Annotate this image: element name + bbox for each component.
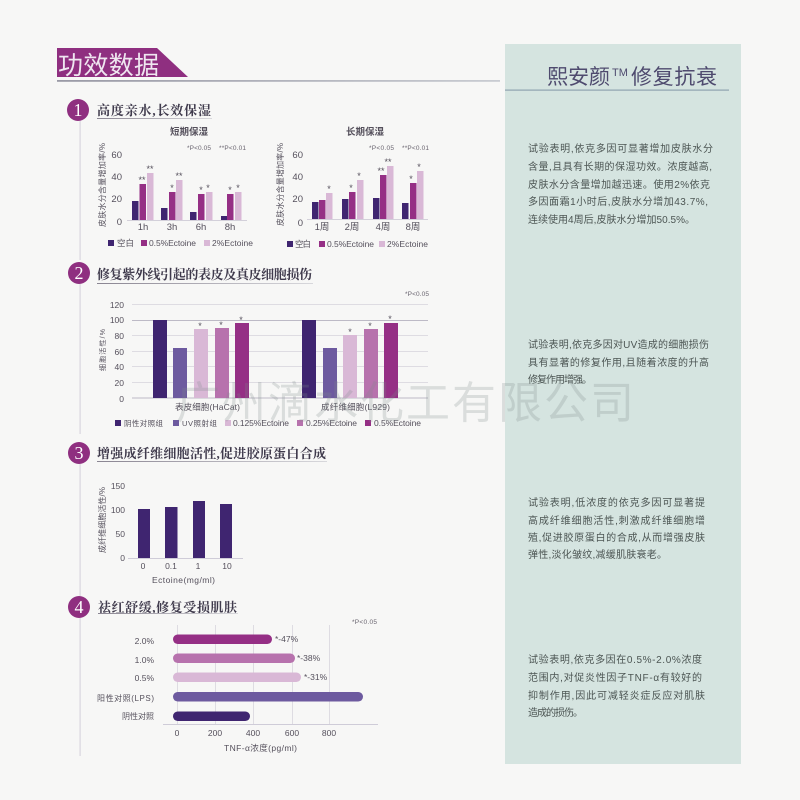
text: fibroblast summary: 殖,促进胶原蛋白的合成,从而增强皮肤 <box>528 531 705 544</box>
chart: fibroblast viability: 10 <box>222 561 232 571</box>
chart: long-term moisture: * <box>357 171 361 181</box>
section 4: soothing <box>68 596 378 756</box>
legend: 0.5%Ectoine <box>374 418 421 428</box>
chart: TNF-alpha: 2.0% <box>135 636 154 646</box>
chart: short-term moisture: ** <box>175 171 183 181</box>
chart: long-term moisture: ** <box>384 157 392 167</box>
chart: long-term moisture: *P<0.05 <box>369 145 394 152</box>
chart: long-term moisture: 2周 <box>345 222 359 233</box>
watermark: 广州滴水化工有限公司 <box>176 379 634 428</box>
chart: TNF-alpha: 200 <box>208 728 222 738</box>
chart: short-term moisture <box>97 126 253 248</box>
chart: cell viability: 40 <box>115 362 124 372</box>
chart: short-term moisture: 60 <box>111 150 122 161</box>
chart: long-term moisture: * <box>409 174 413 184</box>
chart: long-term moisture: 4周 <box>376 222 390 233</box>
panel: right summary column <box>505 44 741 764</box>
chart: TNF-alpha: 400 <box>246 728 260 738</box>
chart: long-term moisture: 40 <box>292 172 303 183</box>
icon: number 1: 1 <box>74 100 82 120</box>
text: TNF summary: 抑制作用,因此可减轻炎症反应对肌肤 <box>528 689 705 702</box>
chart: cell viability: * <box>348 327 352 337</box>
chart: fibroblast viability: 50 <box>116 529 125 539</box>
chart: long-term moisture: 皮肤水分含量增加率/% <box>275 143 285 226</box>
text: fibroblast summary: 试验表明,低浓度的依克多因可显著提 <box>528 496 705 509</box>
chart: long-term moisture: **P<0.01 <box>402 145 429 152</box>
chart: short-term moisture: **P<0.01 <box>219 145 246 152</box>
chart: TNF-alpha: 800 <box>322 728 336 738</box>
chart: short-term moisture: 6h <box>196 222 206 233</box>
text: UV repair summary: 试验表明,依克多因对UV造成的细胞损伤 <box>528 338 709 351</box>
chart: long-term moisture: 1周 <box>315 222 329 233</box>
chart: cell viability: * <box>388 314 392 324</box>
legend <box>287 239 428 249</box>
legend: 阴性对照组 <box>124 418 164 428</box>
chart: cell viability: * <box>239 315 243 325</box>
chart: TNF-alpha <box>97 619 378 753</box>
panel title: 修复抗衰 <box>631 66 717 89</box>
chart: cell viability <box>98 291 429 428</box>
text: hydration summary: 皮肤水分含量增加越迅速。使用2%依克 <box>528 178 710 191</box>
icon: number 3 <box>68 442 90 464</box>
chart: short-term moisture: * <box>170 183 174 193</box>
heading 4: 祛红舒缓,修复受损肌肤 <box>98 600 237 615</box>
title banner <box>57 48 500 82</box>
text: TNF summary: 造成的损伤。 <box>528 706 583 719</box>
chart: cell viability: 60 <box>115 347 124 357</box>
title banner: 功效数据 <box>58 52 159 80</box>
heading 2: 修复紫外线引起的表皮及真皮细胞损伤 <box>97 267 312 282</box>
chart: short-term moisture: 0 <box>117 217 122 228</box>
text: hydration summary: 试验表明,依克多因可显著增加皮肤水分 <box>528 142 713 155</box>
chart: cell viability: 100 <box>110 315 124 325</box>
text: hydration summary <box>528 142 713 226</box>
heading 3: 增强成纤维细胞活性,促进胶原蛋白合成 <box>97 446 326 461</box>
text: hydration summary: 多因面霜1小时后,皮肤水分增加43.7%, <box>528 195 708 208</box>
chart: short-term moisture: 皮肤水分含量增加率/% <box>97 143 107 227</box>
chart: short-term moisture: ** <box>138 175 146 185</box>
legend: 2%Ectoine <box>387 239 428 249</box>
text: TNF summary: 范围内,对促炎性因子TNF-α有较好的 <box>528 671 702 684</box>
text: fibroblast summary <box>528 496 705 561</box>
chart: cell viability: 120 <box>110 300 124 310</box>
chart: TNF-alpha: *-47% <box>275 634 299 644</box>
chart: long-term moisture: 60 <box>292 150 303 161</box>
chart: long-term moisture: 0 <box>298 218 303 229</box>
text: hydration summary: 含量,且具有长期的保湿功效。浓度越高, <box>528 160 712 173</box>
chart: long-term moisture: * <box>327 184 331 194</box>
chart: short-term moisture: *P<0.05 <box>187 145 211 152</box>
legend: 0.5%Ectoine <box>149 238 196 248</box>
chart: short-term moisture: 1h <box>138 222 148 233</box>
text: UV repair summary: 修复作用增强。 <box>528 373 592 386</box>
icon: number 4 <box>68 596 90 618</box>
legend: UV照射组 <box>182 418 218 428</box>
text: TNF summary: 试验表明,依克多因在0.5%-2.0%浓度 <box>528 653 702 666</box>
chart: short-term moisture: 3h <box>167 222 177 233</box>
legend: 0.125%Ectoine <box>233 418 289 428</box>
chart: long-term moisture: ** <box>377 166 385 176</box>
text: UV repair summary: 具有显著的修复作用,且随着浓度的升高 <box>528 356 709 369</box>
chart: cell viability: 80 <box>115 331 124 341</box>
chart: fibroblast viability: 0.1 <box>165 561 177 571</box>
text: UV repair summary <box>528 338 709 386</box>
icon: number 2: 2 <box>74 263 84 283</box>
chart: short-term moisture: * <box>228 185 232 195</box>
chart: short-term moisture: ** <box>146 164 154 174</box>
icon: number 1 <box>67 99 89 121</box>
legend: 空白 <box>117 238 134 248</box>
section 3: fibroblast activity <box>68 442 327 596</box>
section 1: hydration <box>67 99 429 260</box>
chart: TNF-alpha: 阴性对照 <box>122 711 154 721</box>
chart: short-term moisture: * <box>206 183 210 193</box>
chart: cell viability: 表皮细胞(HaCat) <box>175 402 240 412</box>
chart: cell viability: *P<0.05 <box>405 291 429 298</box>
chart: long-term moisture <box>275 126 429 249</box>
chart: cell viability: 成纤维细胞(L929) <box>321 402 390 412</box>
chart: long-term moisture: * <box>417 162 421 172</box>
chart: cell viability: 20 <box>115 378 124 388</box>
chart: TNF-alpha: 0 <box>175 728 180 738</box>
chart: cell viability: * <box>219 320 223 330</box>
chart: short-term moisture: 20 <box>111 194 122 205</box>
chart: TNF-alpha: 600 <box>285 728 299 738</box>
icon: number 2 <box>68 262 90 284</box>
chart: TNF-alpha: *P<0.05 <box>352 619 377 626</box>
chart: cell viability: * <box>198 321 202 331</box>
legend: 0.5%Ectoine <box>327 239 374 249</box>
heading 1: 高度亲水,长效保湿 <box>97 103 211 118</box>
section 2: UV repair <box>68 262 429 434</box>
chart: cell viability: * <box>368 321 372 331</box>
chart: fibroblast viability: 1 <box>196 561 201 571</box>
chart: fibroblast viability: 成纤维细胞活性/% <box>97 487 107 553</box>
icon: number 3: 3 <box>74 443 84 463</box>
chart: TNF-alpha: TNF-α浓度(pg/ml) <box>224 743 297 753</box>
chart: fibroblast viability <box>97 481 243 585</box>
text: fibroblast summary: 高成纤维细胞活性,刺激成纤维细胞增 <box>528 514 705 527</box>
chart: short-term moisture: 40 <box>111 172 122 183</box>
chart: TNF-alpha: *-31% <box>304 672 328 682</box>
legend: 2%Ectoine <box>212 238 253 248</box>
chart: long-term moisture: * <box>349 183 353 193</box>
chart: TNF-alpha: 1.0% <box>135 655 154 665</box>
panel title: TM <box>612 67 628 79</box>
legend <box>108 238 253 248</box>
chart: cell viability: 0 <box>119 394 124 404</box>
chart: long-term moisture: 8周 <box>406 222 420 233</box>
panel title <box>547 66 717 89</box>
icon: number 4: 4 <box>74 597 84 617</box>
chart: TNF-alpha: 0.5% <box>135 673 154 683</box>
chart: long-term moisture: 20 <box>292 194 303 205</box>
chart: short-term moisture: * <box>199 185 203 195</box>
chart: fibroblast viability: 0 <box>120 553 125 563</box>
chart: short-term moisture: * <box>236 183 240 193</box>
chart: long-term moisture: 长期保湿 <box>346 126 384 138</box>
chart: TNF-alpha: *-38% <box>297 653 321 663</box>
chart: fibroblast viability: 150 <box>111 481 125 491</box>
chart: fibroblast viability: Ectoine(mg/ml) <box>152 575 215 585</box>
legend <box>115 418 421 428</box>
text: TNF summary <box>528 653 705 719</box>
chart: TNF-alpha: 阳性对照(LPS) <box>97 693 154 703</box>
legend: 0.25%Ectoine <box>306 418 357 428</box>
legend: 空白 <box>295 239 311 249</box>
panel title: 熙安颜 <box>547 66 610 89</box>
chart: short-term moisture: 8h <box>225 222 235 233</box>
chart: fibroblast viability: 0 <box>141 561 146 571</box>
text: fibroblast summary: 弹性,淡化皱纹,减缓肌肤衰老。 <box>528 548 667 561</box>
chart: fibroblast viability: 100 <box>111 505 125 515</box>
text: hydration summary: 连续使用4周后,皮肤水分增加50.5%。 <box>528 213 695 226</box>
chart: cell viability: 细胞活性/% <box>98 329 107 371</box>
chart: short-term moisture: 短期保湿 <box>170 126 208 138</box>
